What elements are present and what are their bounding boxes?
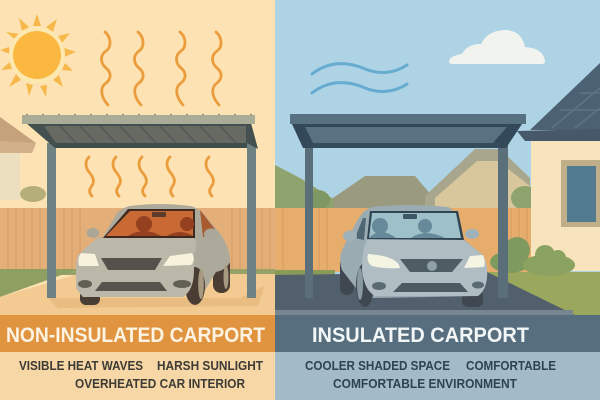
background houses bbox=[306, 149, 539, 210]
hill bbox=[275, 165, 340, 208]
wooden fence bbox=[0, 208, 275, 272]
title band: NON-INSULATED CARPORT bbox=[6, 324, 265, 347]
feature list: COMFORTABLE ENVIRONMENT bbox=[333, 376, 517, 391]
feature list bbox=[0, 352, 275, 400]
driveway bbox=[275, 272, 575, 315]
driveway bbox=[0, 274, 275, 315]
grass bbox=[487, 272, 600, 315]
carport roof and posts bbox=[290, 114, 526, 298]
title band bbox=[275, 315, 600, 352]
left neighbouring house bbox=[0, 117, 46, 202]
wooden fence bbox=[275, 208, 531, 272]
feature list: OVERHEATED CAR INTERIOR bbox=[75, 376, 246, 391]
shrubs bbox=[490, 237, 575, 276]
panel: insulated carport bbox=[275, 0, 600, 400]
panel: non-insulated carport bbox=[0, 0, 275, 400]
icon: cool air waves bbox=[312, 64, 407, 93]
heat waves under roof bbox=[86, 157, 213, 196]
feature list: HARSH SUNLIGHT bbox=[157, 358, 263, 373]
feature list: VISIBLE HEAT WAVES bbox=[19, 358, 143, 373]
feature list: COMFORTABLE bbox=[466, 358, 556, 373]
icon: cloud bbox=[449, 30, 545, 64]
car: cool bbox=[340, 205, 487, 307]
feature list: COOLER SHADED SPACE bbox=[305, 358, 450, 373]
title band: INSULATED CARPORT bbox=[312, 324, 529, 347]
title band bbox=[0, 315, 275, 352]
icon: sun bbox=[0, 14, 76, 97]
grass bbox=[0, 269, 275, 297]
feature list bbox=[275, 352, 600, 400]
carport roof and posts bbox=[22, 114, 258, 298]
heat waves above roof bbox=[102, 32, 221, 105]
house right bbox=[517, 63, 600, 271]
car: overheated bbox=[76, 204, 230, 305]
